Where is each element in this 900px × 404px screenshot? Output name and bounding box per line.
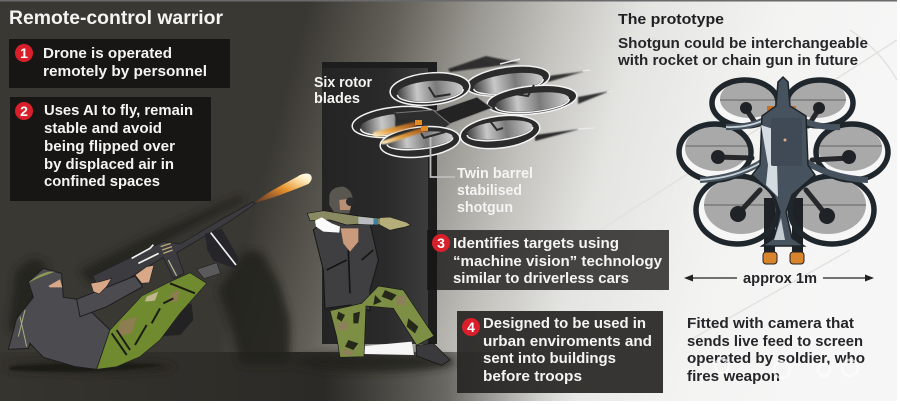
callout 1: Drone is operated bbox=[43, 45, 172, 62]
rear rotor: top left bbox=[389, 70, 471, 108]
text: camera feed note: sends live feed to screen bbox=[687, 333, 863, 350]
callout 2 bbox=[10, 97, 211, 201]
callout 3: similar to driverless cars bbox=[453, 270, 629, 287]
callout 2: by displaced air in bbox=[44, 156, 174, 173]
callout 4: 4 bbox=[467, 319, 475, 335]
callout 3: “machine vision” technology bbox=[453, 253, 663, 270]
rotor: left bbox=[351, 102, 441, 142]
callout 2: confined spaces bbox=[44, 173, 160, 190]
label: twin barrel stabilised shotgun bbox=[457, 165, 533, 216]
callout 3: 3 bbox=[437, 235, 445, 251]
callout 4: urban enviroments and bbox=[483, 333, 652, 350]
rear rotor: top right bbox=[464, 61, 552, 101]
label: twin barrel stabilised shotgun: Twin barrel bbox=[457, 165, 533, 182]
callout 3: Identifies targets using bbox=[453, 235, 619, 252]
callout 2: being flipped over bbox=[44, 138, 175, 155]
callout 1: remotely by personnel bbox=[43, 63, 207, 80]
wall shadows bbox=[5, 195, 455, 373]
callout 2: 2 bbox=[20, 103, 28, 119]
frame arms bbox=[700, 118, 868, 180]
motor arms bbox=[716, 109, 849, 216]
label: six rotor blades: Six rotor bbox=[314, 74, 372, 91]
door bbox=[322, 62, 437, 344]
shotgun flashes bbox=[373, 122, 417, 137]
callout 4: sent into buildings bbox=[483, 350, 616, 367]
text: camera feed note: Fitted with camera that bbox=[687, 315, 854, 332]
callout 4: Designed to be used in bbox=[483, 315, 646, 332]
twin barrels and nozzles bbox=[764, 198, 775, 254]
rear rotor: right bbox=[486, 81, 578, 119]
callout 1: 1 bbox=[20, 45, 28, 61]
label: twin barrel stabilised shotgun: stabilised bbox=[457, 182, 522, 199]
struts bbox=[395, 85, 534, 138]
drone body bbox=[433, 97, 492, 125]
callout 2: stable and avoid bbox=[44, 120, 162, 137]
label: six rotor blades: blades bbox=[314, 90, 360, 107]
watermark bbox=[715, 359, 858, 378]
motion streaks bbox=[448, 56, 610, 141]
heading: the prototype: The prototype bbox=[618, 11, 724, 28]
prototype drone bbox=[679, 77, 888, 264]
label: twin barrel stabilised shotgun: shotgun bbox=[457, 199, 513, 216]
leader line to shotgun bbox=[430, 137, 455, 177]
rotor discs bbox=[685, 80, 882, 234]
dimension arrow: approx 1m bbox=[684, 270, 874, 287]
soldier firing on his back bbox=[8, 173, 312, 372]
callout 1 bbox=[9, 39, 230, 88]
callout 4 bbox=[457, 311, 663, 393]
outer ring frame bbox=[679, 80, 888, 244]
rotor: bottom left bbox=[379, 123, 461, 161]
heading: remote-control warrior: Remote-control warrior bbox=[9, 8, 224, 29]
text: camera feed note: fires weapon bbox=[687, 368, 780, 385]
text: camera feed note: operated by soldier, who bbox=[687, 350, 865, 367]
label: six rotor blades bbox=[314, 74, 372, 107]
text: camera feed note bbox=[687, 315, 865, 385]
callout 4: before troops bbox=[483, 368, 582, 385]
dimension arrow: approx 1m: approx 1m bbox=[743, 270, 817, 287]
heading: the prototype bbox=[617, 11, 868, 69]
rotor: bottom right bbox=[458, 111, 542, 153]
kneeling soldier with rocket launcher bbox=[307, 187, 450, 365]
callout 3 bbox=[427, 230, 669, 290]
flying drone with motion streaks bbox=[351, 56, 612, 161]
central body bbox=[752, 77, 815, 246]
callout 2: Uses AI to fly, remain bbox=[44, 102, 193, 119]
white backing of rotors bbox=[679, 80, 888, 244]
heading: the prototype: with rocket or chain gun in future bbox=[617, 52, 858, 69]
heading: the prototype: Shotgun could be interchangeable bbox=[618, 35, 868, 52]
